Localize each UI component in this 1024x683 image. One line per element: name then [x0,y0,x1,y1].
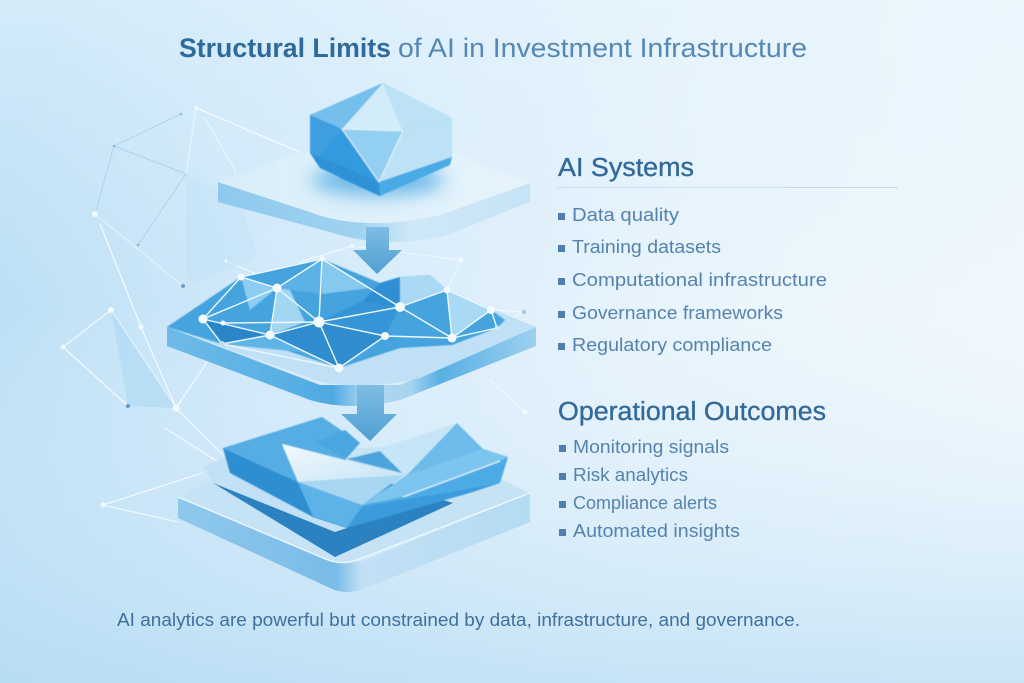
mesh network lines and nodes [198,256,500,372]
list item: Risk analytics: Risk analytics [573,464,688,485]
crystal: bottom gem [223,417,508,528]
list item: Automated insights: Automated insights [573,520,740,541]
section: AI Systems [558,154,898,355]
platform 2 (middle) [167,300,536,406]
section: Operational Outcomes [558,398,826,541]
list item: Monitoring signals: Monitoring signals [573,436,729,457]
heading: Operational Outcomes: Operational Outcomes [558,398,826,426]
list item: Compliance alerts: Compliance alerts [573,492,717,513]
list item: Regulatory compliance: Regulatory compliance [572,334,772,355]
crystal: top gem [310,83,452,196]
platform 3 (bottom) [178,445,530,592]
faint translucent facets [111,174,258,408]
footer caption: AI analytics are powerful but constrained by data, infrastructure, and governance. [117,610,800,630]
list item: Training datasets: Training datasets [572,236,721,257]
title: Structural Limits [179,33,391,63]
list item: Data quality: Data quality [572,204,680,225]
heading: AI Systems: AI Systems [558,154,694,182]
list item: Governance frameworks: Governance frameworks [572,302,783,323]
crystal mesh on middle platform [167,259,505,368]
list item: Computational infrastructure: Computational infrastructure [572,269,827,290]
network nodes (outer) [60,106,528,508]
shard under bottom gem [203,458,453,557]
divider [558,187,898,188]
arrow: platform 1 to mesh [353,227,402,274]
title: of AI in Investment Infrastructure [398,33,807,63]
arrow: platform 2 to gem 3 [341,385,397,441]
network: left wireframe lines [63,108,525,522]
platform 1 (top) [218,152,530,242]
